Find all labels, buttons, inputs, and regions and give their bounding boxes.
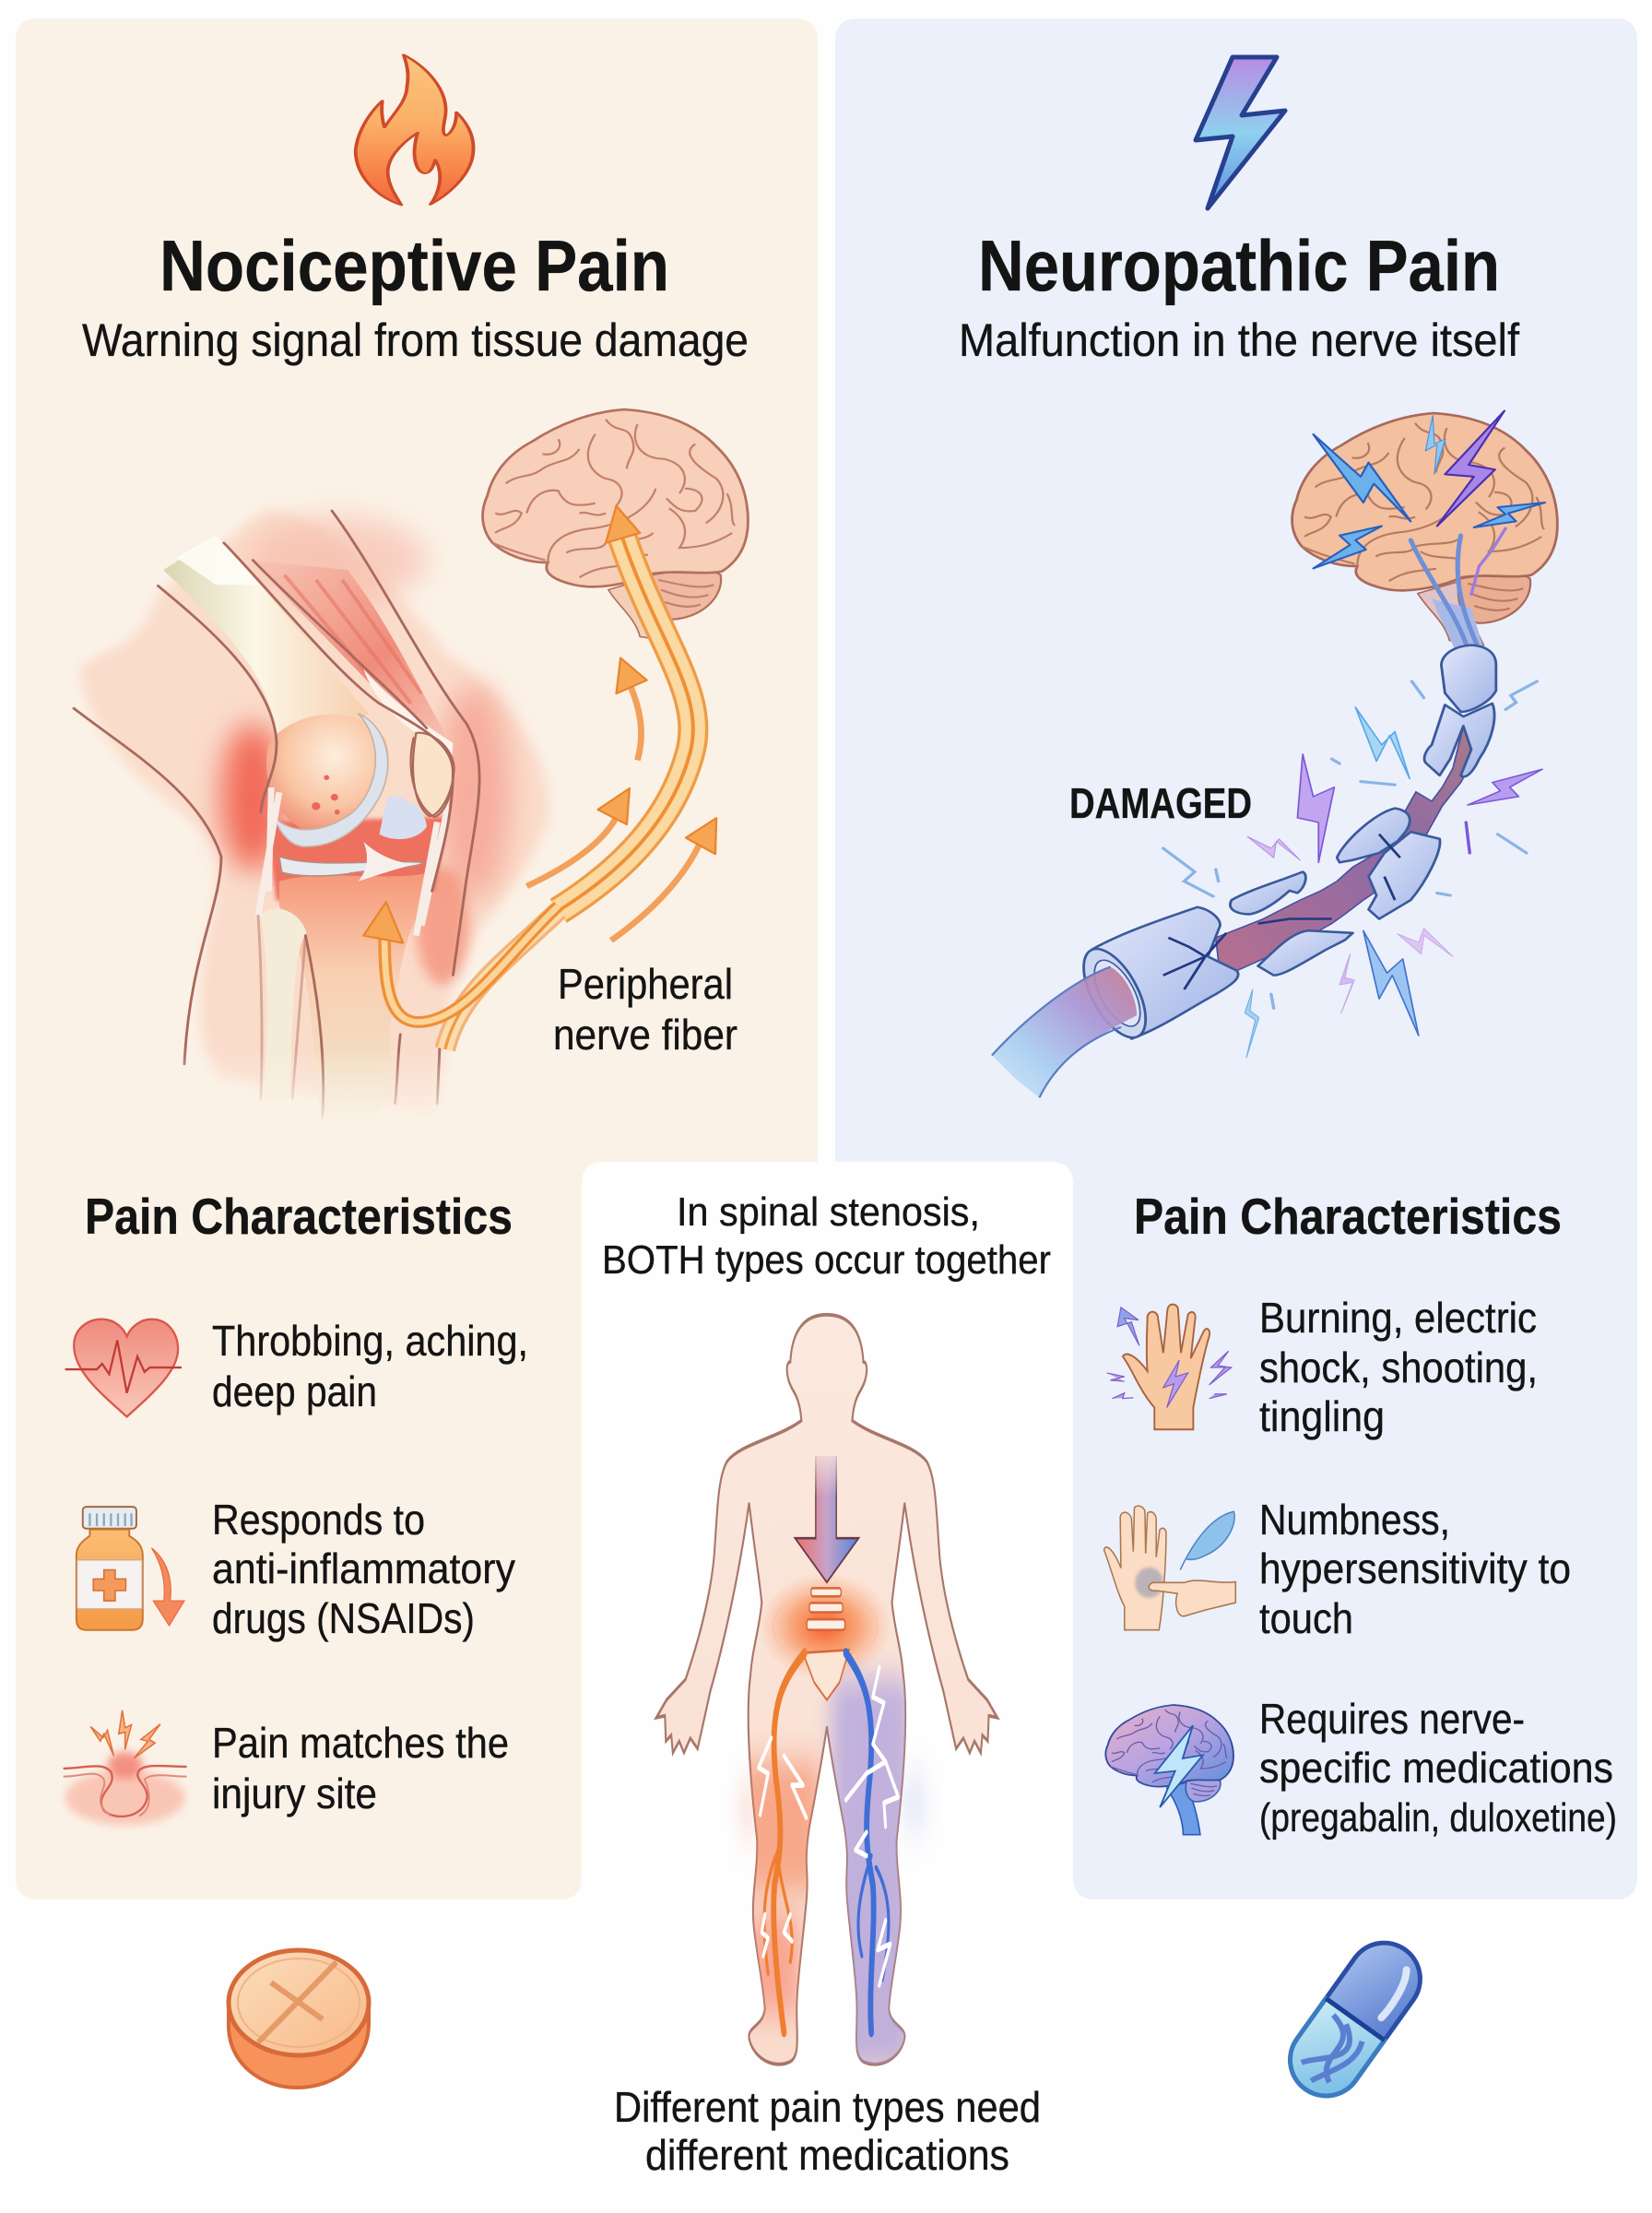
sheath fragments <box>1071 645 1496 1046</box>
text: responds: anti-inflammatory <box>212 1544 515 1592</box>
debris squiggles <box>1163 681 1537 1008</box>
nerve fibres entering brain <box>1410 528 1505 651</box>
text: throbbing <box>212 1317 528 1415</box>
text: requires: Requires nerve- <box>1259 1695 1525 1743</box>
text: burning: Burning, electric <box>1259 1294 1537 1342</box>
heading: neuropathic: Neuropathic Pain <box>978 225 1500 306</box>
white shocks <box>759 1668 898 1985</box>
lumbar ache glow <box>759 1572 892 1681</box>
icon: injury site <box>64 1710 187 1825</box>
illustration: body with both pain types <box>656 1315 997 2067</box>
icon: flame <box>356 54 473 205</box>
icon: hand touched with feather <box>1104 1506 1235 1630</box>
text: both types occur together: BOTH types occur together <box>602 1237 1051 1283</box>
text: responds: drugs (NSAIDs) <box>212 1594 475 1642</box>
leg washes <box>739 1679 911 2067</box>
panel: neuropathic background <box>835 18 1637 1899</box>
body silhouette <box>656 1315 997 2065</box>
text: numbness: hypersensitivity to <box>1259 1544 1571 1592</box>
icon: lightning bolt <box>1196 57 1285 208</box>
subheading: nociceptive: Warning signal from tissue damage <box>82 314 749 366</box>
text: both types occur together <box>602 1189 1051 1283</box>
cracks <box>1163 834 1400 989</box>
text: requires <box>1259 1695 1617 1840</box>
label: peripheral nerve fiber: nerve fiber <box>553 1011 738 1059</box>
blue nerve <box>846 1653 889 2032</box>
exposed jagged nerve core <box>1216 726 1477 971</box>
text: numbness: touch <box>1259 1594 1353 1642</box>
text: responds <box>212 1496 515 1642</box>
label: peripheral nerve fiber <box>553 960 738 1059</box>
nerve tail <box>992 967 1137 1097</box>
text: burning: shock, shooting, <box>1259 1343 1538 1391</box>
downward arrow <box>795 1456 858 1582</box>
text: responds: Responds to <box>212 1496 425 1544</box>
text: pain matches: Pain matches the <box>212 1719 509 1767</box>
text: different medications: different medications <box>645 2131 1009 2179</box>
text: burning <box>1259 1294 1538 1440</box>
heading: nociceptive: Nociceptive Pain <box>159 225 669 306</box>
label: damaged: DAMAGED <box>1069 779 1252 827</box>
illustration: brain (nociceptive) <box>483 409 748 642</box>
illustration: brain with lightning (neuropathic) <box>1292 413 1557 645</box>
heading: pain characteristics left: Pain Characteristics <box>85 1188 513 1245</box>
text: different medications: Different pain types need <box>614 2083 1041 2131</box>
orange nerve <box>764 1653 805 2032</box>
icon: tablet <box>229 1950 369 2088</box>
text: numbness <box>1259 1496 1571 1642</box>
panel: nociceptive background <box>16 18 818 1899</box>
icon: capsule <box>1276 1929 1434 2110</box>
lightning sparks <box>1245 411 1545 1058</box>
spine <box>803 1588 849 1700</box>
leg glow outside body <box>739 1768 926 1844</box>
text: pain matches: injury site <box>212 1769 377 1817</box>
text: different medications <box>614 2083 1041 2179</box>
text: throbbing: Throbbing, aching, <box>212 1317 528 1365</box>
icon: medicine bottle with arrow <box>77 1507 184 1630</box>
label: peripheral nerve fiber: Peripheral <box>558 960 733 1008</box>
heading: pain characteristics right: Pain Characteristics <box>1134 1188 1562 1245</box>
arrow: peripheral nerve pathway <box>363 506 716 1049</box>
illustration: damaged nerve <box>992 411 1545 1097</box>
panel: centre card <box>582 1162 1073 2213</box>
text: numbness: Numbness, <box>1259 1496 1450 1544</box>
icon: brain with bolt <box>1105 1705 1233 1835</box>
text: pain matches <box>212 1719 509 1817</box>
illustration: inflamed knee joint <box>74 511 549 1129</box>
text: burning: tingling <box>1259 1392 1385 1440</box>
text: throbbing: deep pain <box>212 1367 377 1415</box>
icon: heart with pulse <box>65 1320 182 1416</box>
text: both types occur together: In spinal stenosis, <box>677 1189 980 1235</box>
icon: hand with shock <box>1107 1305 1232 1429</box>
text: requires: specific medications <box>1259 1744 1613 1792</box>
subheading: neuropathic: Malfunction in the nerve itself <box>959 314 1519 366</box>
